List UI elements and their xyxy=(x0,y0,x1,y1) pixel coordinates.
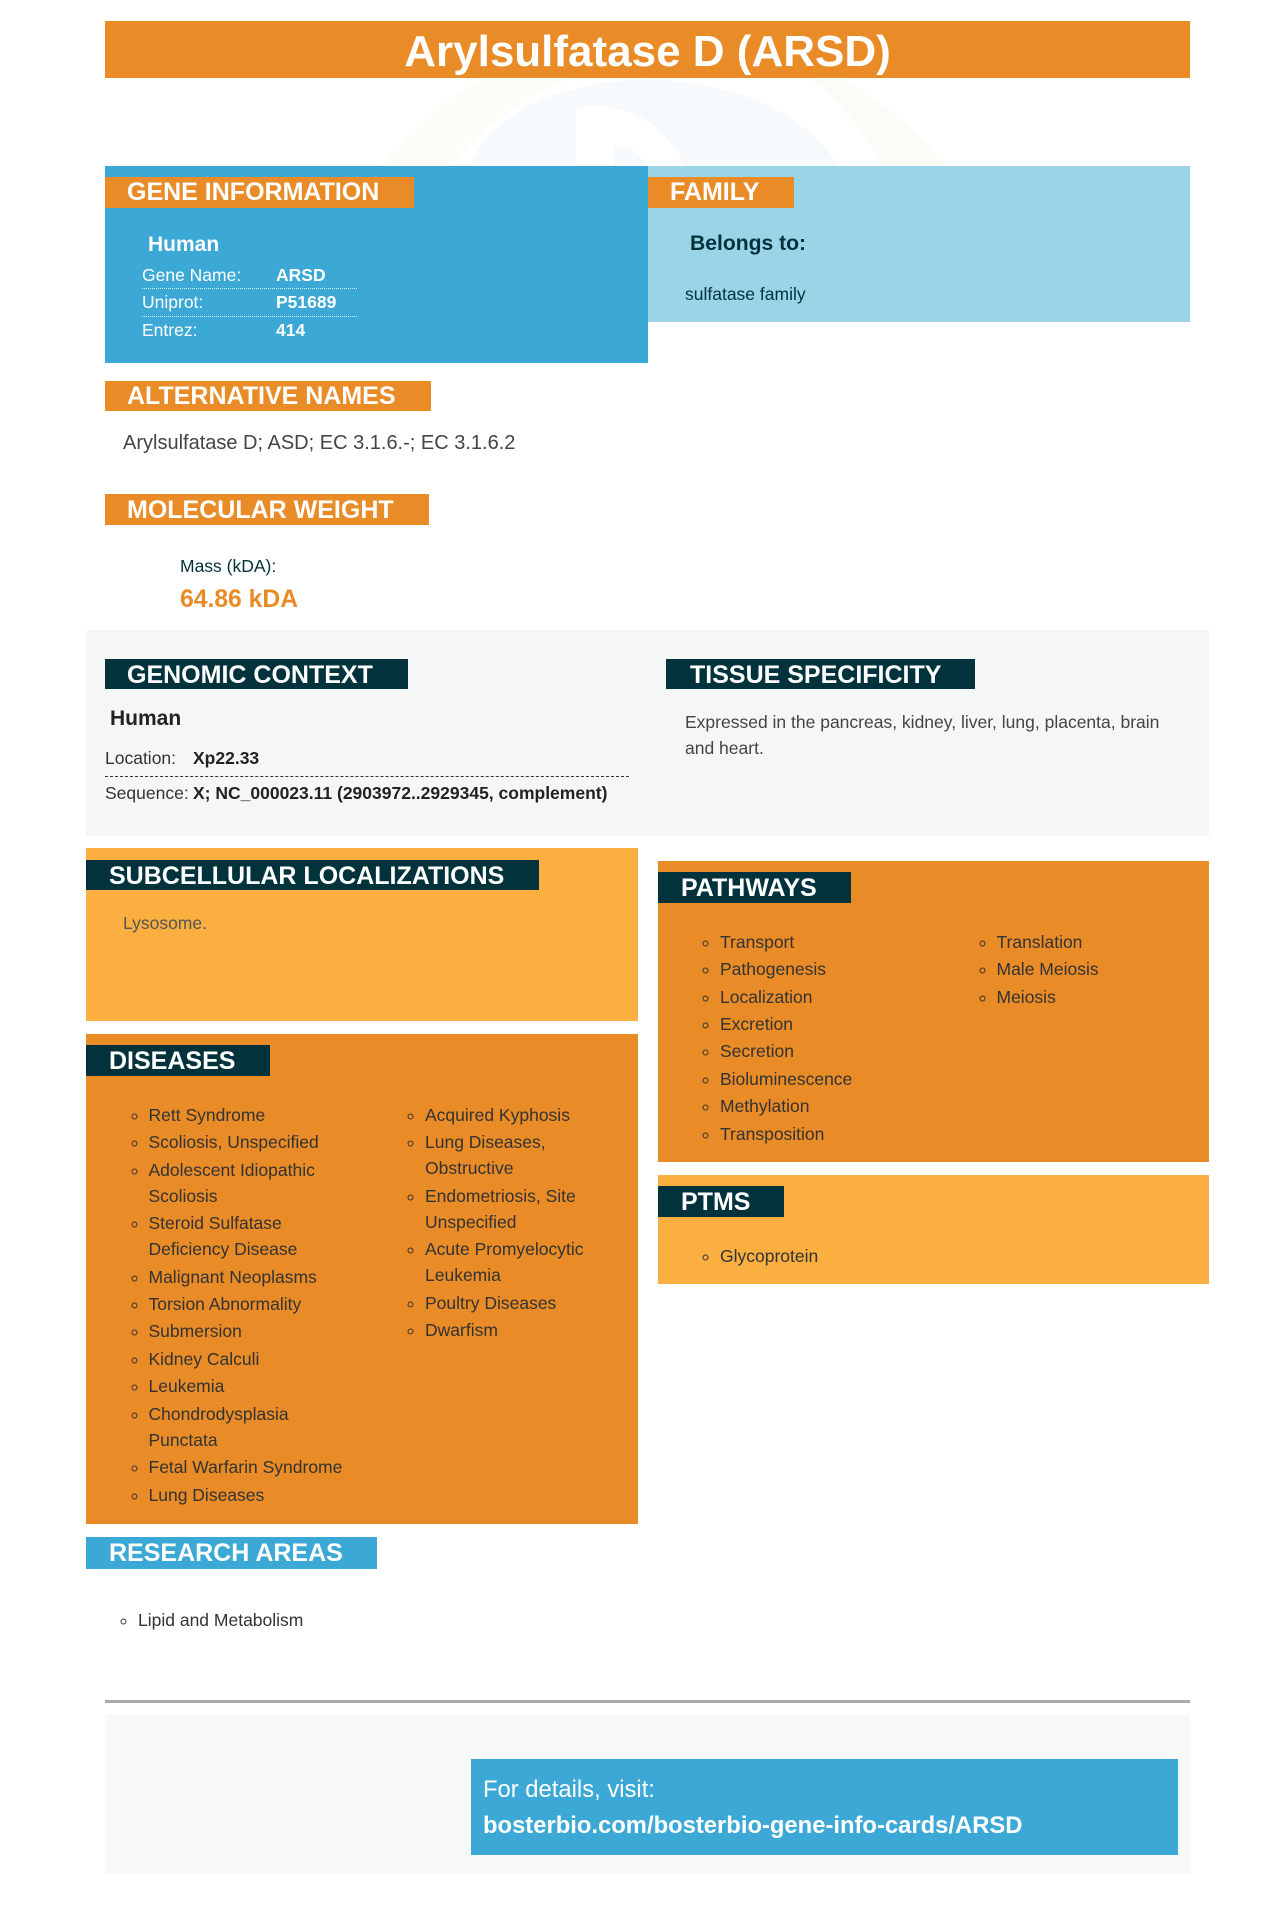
gene name row: ARSD xyxy=(276,265,326,285)
disease list column 1: Adolescent Idiopathic xyxy=(148,1160,315,1180)
disease list column 2 xyxy=(408,1105,584,1340)
pathway list column 1: Secretion xyxy=(720,1041,794,1061)
alternative names text: Arylsulfatase D; ASD; EC 3.1.6.-; EC 3.1.6.2 xyxy=(123,432,515,454)
heading: molecular weight: MOLECULAR WEIGHT xyxy=(127,496,394,524)
localization text: Lysosome. xyxy=(123,913,207,933)
family value: sulfatase family xyxy=(685,284,806,304)
pathway list column 1 xyxy=(702,932,852,1144)
species label: Human xyxy=(110,707,181,730)
pathway list column 1: Localization xyxy=(720,987,812,1007)
pathway list column 1: Pathogenesis xyxy=(720,959,826,979)
location row: Xp22.33 xyxy=(193,748,259,768)
tissue specificity text xyxy=(685,712,1159,758)
panel: ptms xyxy=(658,1175,1209,1284)
heading: research areas: RESEARCH AREAS xyxy=(109,1538,343,1566)
disease list column 1: Fetal Warfarin Syndrome xyxy=(148,1457,342,1477)
disease list column 1: Malignant Neoplasms xyxy=(148,1267,317,1287)
uniprot row xyxy=(142,289,357,316)
panel: footer xyxy=(105,1715,1190,1874)
heading: ptms xyxy=(658,1186,784,1217)
heading: alternative names: ALTERNATIVE NAMES xyxy=(127,382,396,410)
heading: family: FAMILY xyxy=(670,178,759,206)
pathway list column 1: Bioluminescence xyxy=(720,1069,852,1089)
heading: family xyxy=(648,177,794,208)
tissue specificity text: Expressed in the pancreas, kidney, liver, lung, placenta, brain xyxy=(685,712,1159,732)
tissue specificity text: and heart. xyxy=(685,738,764,758)
disease list column 2: Leukemia xyxy=(425,1265,501,1285)
heading: diseases xyxy=(86,1045,270,1076)
disease list column 1: Kidney Calculi xyxy=(148,1349,259,1369)
uniprot row: Uniprot: xyxy=(142,292,203,312)
gene name row xyxy=(142,262,357,289)
pathway list column 2 xyxy=(980,932,1099,1007)
panel: family xyxy=(648,166,1190,322)
research areas list: Lipid and Metabolism xyxy=(138,1610,303,1630)
pathway list column 2: Male Meiosis xyxy=(996,959,1099,979)
panel: genomic context and tissue specificity xyxy=(86,630,1209,836)
disease list column 1: Deficiency Disease xyxy=(148,1239,297,1259)
heading: pathways xyxy=(658,872,851,903)
disease list column 1: Torsion Abnormality xyxy=(148,1294,301,1314)
disease list column 1: Scoliosis, Unspecified xyxy=(148,1132,319,1152)
disease list column 1: Steroid Sulfatase xyxy=(148,1213,282,1233)
ptm list: Glycoprotein xyxy=(720,1246,818,1266)
disease list column 2: Dwarfism xyxy=(425,1320,498,1340)
disease list column 2: Unspecified xyxy=(425,1212,516,1232)
heading: genomic context: GENOMIC CONTEXT xyxy=(127,660,373,688)
heading: subcellular localizations: SUBCELLULAR LOCALIZATIONS xyxy=(109,862,504,890)
callout label: For details, visit: xyxy=(483,1776,655,1803)
disease list column 2: Lung Diseases, xyxy=(425,1132,546,1152)
callout url: bosterbio.com/bosterbio-gene-info-cards/ARSD xyxy=(483,1812,1022,1839)
pathway list column 2: Translation xyxy=(996,932,1082,952)
pathway list column 1: Transposition xyxy=(720,1124,824,1144)
title xyxy=(105,21,1190,78)
disease list column 2: Obstructive xyxy=(425,1158,514,1178)
belongs to label: Belongs to: xyxy=(690,232,806,255)
mass value: 64.86 kDA xyxy=(180,586,298,613)
footer divider xyxy=(105,1700,1190,1703)
location row: Location: xyxy=(105,748,176,768)
disease list column 1: Punctata xyxy=(148,1430,218,1450)
disease list column 2: Acute Promyelocytic xyxy=(425,1239,584,1259)
disease list column 1: Submersion xyxy=(148,1321,242,1341)
heading: ptms: PTMS xyxy=(681,1188,750,1216)
panel: pathways xyxy=(658,861,1209,1162)
entrez row: 414 xyxy=(276,320,305,340)
heading: gene information: GENE INFORMATION xyxy=(127,178,379,206)
panel: genomic context and tissue specificity: X; NC_000023.11 (2903972..2929345, complement) xyxy=(193,783,607,803)
species label: Human xyxy=(148,233,219,256)
panel: gene information xyxy=(105,166,648,363)
callout: details link xyxy=(471,1759,1178,1855)
pathway list column 1: Transport xyxy=(720,932,794,952)
location row xyxy=(105,745,629,777)
gene name row: Gene Name: xyxy=(142,265,241,285)
disease list column 2: Endometriosis, Site xyxy=(425,1186,576,1206)
disease list column 1: Scoliosis xyxy=(148,1186,218,1206)
title: Arylsulfatase D (ARSD) xyxy=(404,27,891,76)
disease list column 2: Poultry Diseases xyxy=(425,1293,556,1313)
uniprot row: P51689 xyxy=(276,292,336,312)
panel: diseases xyxy=(86,1034,638,1524)
disease list column 1: Leukemia xyxy=(148,1376,224,1396)
watermark logo xyxy=(470,78,944,166)
entrez row xyxy=(142,320,306,340)
sequence row xyxy=(105,783,607,803)
pathway list column 1: Excretion xyxy=(720,1014,793,1034)
sequence row: Sequence: xyxy=(105,783,189,803)
panel: subcellular localizations xyxy=(86,848,638,1021)
disease list column 2: Acquired Kyphosis xyxy=(425,1105,570,1125)
heading: pathways: PATHWAYS xyxy=(681,874,817,902)
disease list column 1 xyxy=(132,1105,342,1505)
heading: diseases: DISEASES xyxy=(109,1046,235,1074)
heading: tissue specificity: TISSUE SPECIFICITY xyxy=(690,660,941,688)
pathway list column 1: Methylation xyxy=(720,1096,810,1116)
mass label: Mass (kDA): xyxy=(180,556,276,576)
disease list column 1: Lung Diseases xyxy=(148,1485,264,1505)
disease list column 1: Chondrodysplasia xyxy=(148,1404,289,1424)
entrez row: Entrez: xyxy=(142,320,197,340)
disease list column 1: Rett Syndrome xyxy=(148,1105,265,1125)
pathway list column 2: Meiosis xyxy=(996,987,1056,1007)
